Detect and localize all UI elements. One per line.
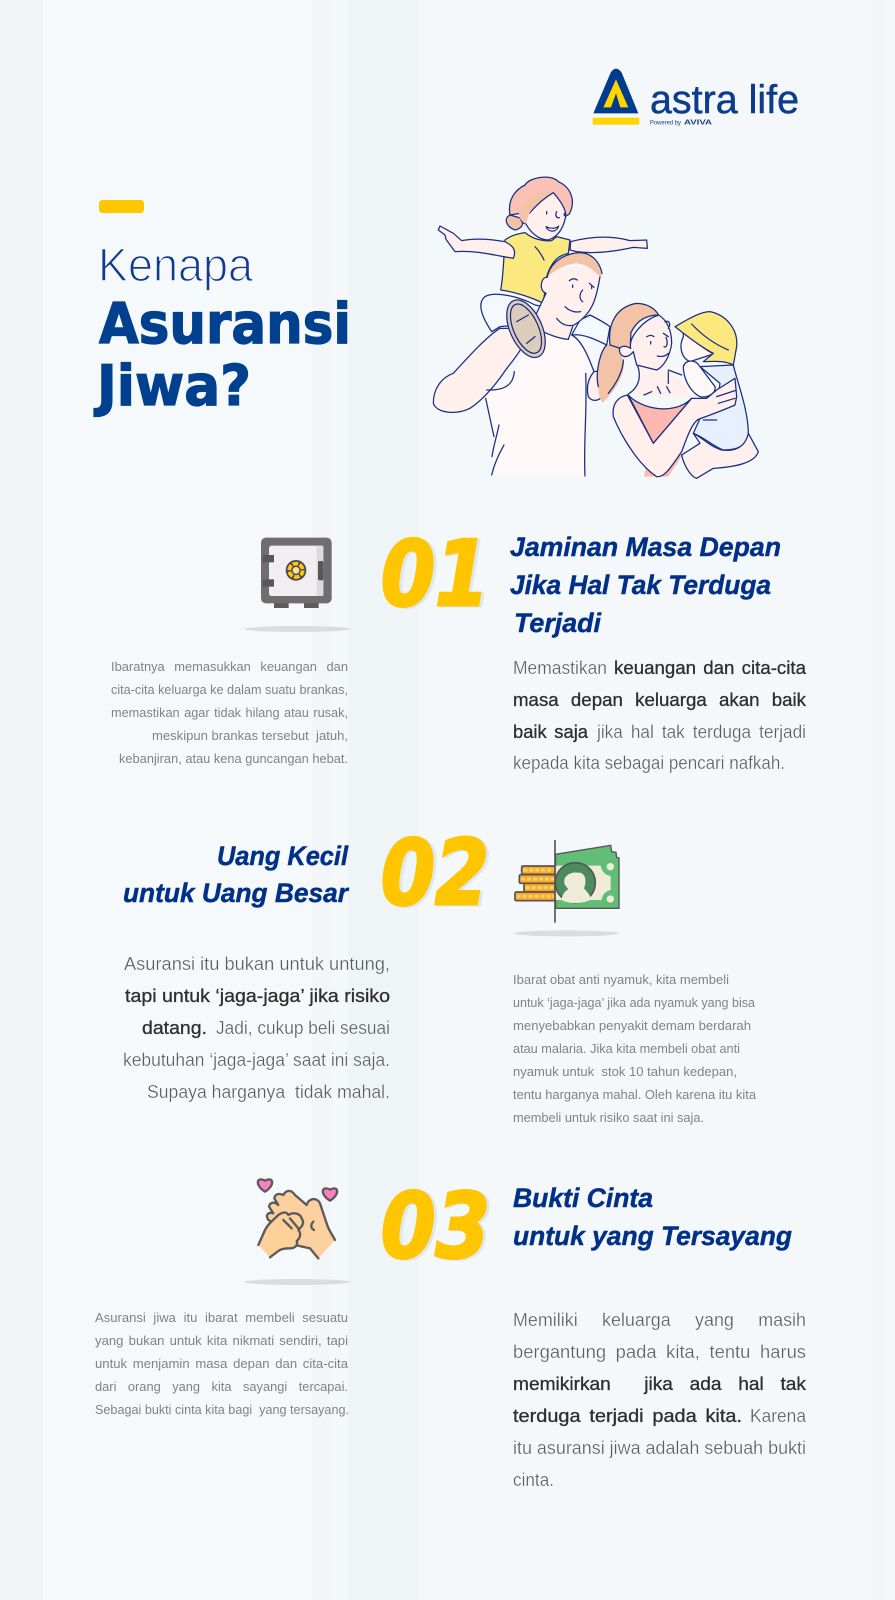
mother's ponytail [597, 343, 624, 403]
child's hair [506, 215, 523, 230]
body text 01: masa depan keluarga akan baik [513, 689, 807, 710]
icon: safe [245, 538, 350, 632]
section 03 [95, 1174, 807, 1490]
baby's face [681, 333, 713, 362]
mother's face [619, 315, 672, 370]
child's shoe [499, 294, 553, 363]
body text 01: kepada kita sebagai pencari nafkah. [513, 752, 785, 773]
logo: astra life: AVIVA [684, 118, 713, 126]
body text 02: kebutuhan ‘jaga-jaga’ saat ini saja. [123, 1049, 390, 1070]
body text 02: tapi untuk ‘jaga-jaga’ jika risiko [125, 985, 390, 1006]
body text 03: bergantung pada kita, tentu harus [513, 1341, 806, 1362]
body text 01: jika hal tak terduga terjadi [596, 721, 806, 742]
heading 01: Jika Hal Tak Terduga [510, 570, 771, 600]
father's hand behind mother [587, 370, 607, 400]
title: Kenapa Asuransi Jiwa?: Kenapa [98, 238, 254, 291]
child's trousers [481, 294, 543, 332]
body text 03: Memiliki keluarga yang masih [513, 1309, 806, 1330]
logo: astra life: Powered by [650, 120, 681, 126]
child's hat [509, 177, 572, 217]
side note 03: dari orang yang kita sayangi tercapai. [95, 1379, 348, 1394]
number 02: 02 [381, 821, 489, 926]
heading 01: Jaminan Masa Depan [510, 532, 781, 562]
side note 02: untuk ‘jaga-jaga’ jika ada nyamuk yang bisa [513, 995, 756, 1010]
logo: astra life: astra life [650, 78, 799, 122]
body text 01 [513, 657, 807, 773]
body text 02 [123, 953, 390, 1102]
body text 03: Karena [750, 1405, 807, 1426]
mother's hair [610, 303, 659, 350]
title: Kenapa Asuransi Jiwa?: Jiwa? [93, 354, 251, 419]
title accent bar [99, 200, 144, 213]
side note 02 [513, 972, 757, 1125]
heading 03: Bukti Cinta [513, 1183, 653, 1213]
mother's lower hand [682, 433, 758, 478]
father's arm [433, 328, 523, 412]
father's shirt [485, 328, 593, 475]
side note 02: menyebabkan penyakit demam berdarah [513, 1018, 751, 1033]
father's head [535, 266, 600, 339]
side note 01: kebanjiran, atau kena guncangan hebat. [119, 751, 348, 766]
heading 01 [510, 532, 781, 638]
heading 02: untuk Uang Besar [123, 878, 349, 908]
body text 03: cinta. [513, 1469, 554, 1490]
side note 03: Sebagai bukti cinta kita bagi yang tersayang. [95, 1402, 349, 1417]
icon: clasped hands with hearts [244, 1179, 350, 1285]
side note 01: meskipun brankas tersebut jatuh, [152, 728, 348, 743]
logo: astra life [593, 69, 799, 126]
section 02 [123, 821, 757, 1125]
child's shirt [501, 233, 570, 303]
side note 02: atau malaria. Jika kita membeli obat anti [513, 1041, 740, 1056]
mother's top [628, 395, 692, 443]
body text 02: Asuransi itu bukan untuk untung, [124, 953, 390, 974]
mother's neck and chest [628, 363, 692, 398]
body text 03 [513, 1309, 807, 1490]
illustration: family [433, 177, 758, 478]
child's arms [438, 226, 515, 258]
side note 02: nyamuk untuk stok 10 tahun kedepan, [513, 1064, 737, 1079]
body text 02: datang. [142, 1017, 207, 1038]
body text 03: memikirkan jika ada hal tak [513, 1373, 807, 1394]
number 03: 03 [381, 1174, 490, 1279]
side note 02: membeli untuk risiko saat ini saja. [513, 1110, 704, 1125]
heading 03: untuk yang Tersayang [513, 1221, 792, 1251]
body text 01: baik saja [513, 721, 589, 742]
side note 01 [111, 659, 348, 766]
side note 03 [95, 1310, 349, 1417]
number 01: 01 [381, 522, 489, 627]
baby's hat [675, 312, 737, 365]
heading 02: Uang Kecil [217, 841, 348, 871]
side note 03: yang bukan untuk kita nikmati sendiri, tapi [95, 1333, 348, 1348]
side note 01: memastikan agar tidak hilang atau rusak, [111, 705, 348, 720]
icon: coins and banknote [514, 840, 619, 936]
mother's arm [613, 378, 737, 477]
body text 03: itu asuransi jiwa adalah sebuah bukti [513, 1437, 806, 1458]
section 01 [111, 522, 807, 773]
side note 03: Asuransi jiwa itu ibarat membeli sesuatu [95, 1310, 348, 1325]
heading 03 [513, 1183, 792, 1251]
baby's arm [683, 361, 715, 397]
side note 01: cita-cita keluarga ke dalam suatu brankas, [111, 682, 348, 697]
baby's clothes [693, 365, 748, 450]
side note 02: tentu harganya mahal. Oleh karena itu kita [513, 1087, 757, 1102]
body text 02: Supaya harganya tidak mahal. [147, 1081, 390, 1102]
heading 02 [123, 841, 349, 908]
heading 01: Terjadi [514, 608, 601, 638]
body text 01: Memastikan [513, 657, 607, 678]
title: Kenapa Asuransi Jiwa? [93, 200, 351, 419]
child's face [521, 193, 566, 240]
title: Kenapa Asuransi Jiwa?: Asuransi [99, 292, 351, 357]
side note 03: untuk menjamin masa depan dan cita-cita [95, 1356, 349, 1371]
side note 01: Ibaratnya memasukkan keuangan dan [111, 659, 348, 674]
body text 02: Jadi, cukup beli sesuai [216, 1017, 390, 1038]
body text 01: keuangan dan cita-cita [614, 657, 807, 678]
side note 02: Ibarat obat anti nyamuk, kita membeli [513, 972, 729, 987]
body text 03: terduga terjadi pada kita. [513, 1405, 742, 1426]
